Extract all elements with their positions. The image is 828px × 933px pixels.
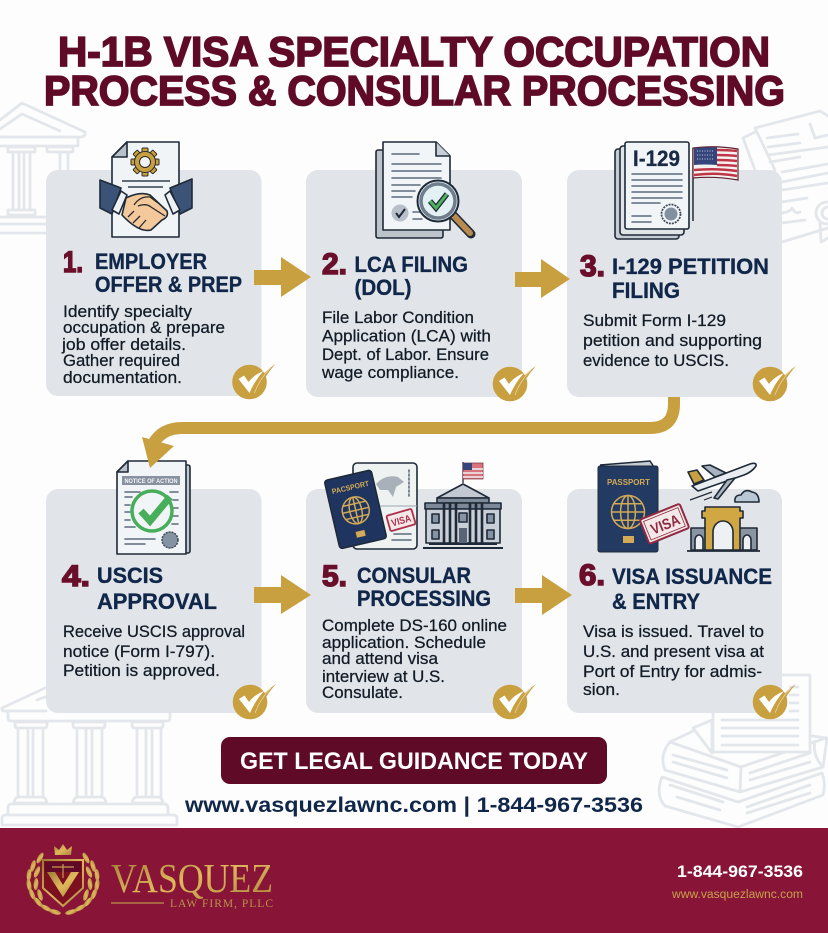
card 2 body text [321, 309, 491, 382]
card 1 body text: documentation. [63, 369, 182, 387]
card 6 body text: Port of Entry for admis- [583, 663, 762, 681]
icon: passport, visa stamp, plane and arch [598, 461, 760, 552]
title: H-1B VISA SPECIALTY OCCUPATION [58, 28, 770, 75]
footer website: www.vasquezlawnc.com [671, 889, 803, 901]
icon: notice of action approval: NOTICE OF ACTION [124, 478, 178, 485]
card 1 heading: EMPLOYER [95, 249, 207, 274]
arrow: step 1 to 2 [254, 257, 311, 297]
icon: passport, visa stamp, plane and arch: PASSPORT [607, 478, 650, 487]
icon: I-129 form and US flag: I-129 [633, 146, 680, 171]
card 5 body text: interview at U.S. [322, 668, 445, 686]
arrow: step 5 to 6 [515, 575, 572, 615]
card 3 heading: FILING [612, 278, 680, 303]
card 6 body text [583, 623, 764, 699]
card 5 heading: PROCESSING [357, 586, 491, 611]
card 3 panel [567, 170, 782, 397]
check badge 4 [233, 684, 276, 719]
card 5 body text [322, 617, 507, 702]
icon: passport, visa page and consulate [324, 462, 503, 549]
contact line: www.vasquezlawnc.com | 1-844-967-3536 [184, 794, 643, 817]
logo: firm name: VASQUEZ [111, 855, 273, 901]
card 1 panel [46, 170, 262, 396]
arrow: step 4 to 5 [254, 575, 311, 614]
check badge 3 [753, 366, 796, 401]
check badge 6 [753, 684, 796, 719]
card 4 body text [63, 623, 245, 680]
arrow: step 2 to 3 [515, 259, 570, 298]
card 2 heading: (DOL) [354, 275, 412, 300]
card 3 heading: I-129 PETITION [612, 254, 769, 279]
check badge 5 [493, 684, 536, 719]
icon: notice of action approval [117, 461, 190, 554]
card 2 body text: File Labor Condition [322, 309, 474, 327]
card 3 body text: Submit Form I-129 [583, 312, 726, 330]
logo: firm name: LAW FIRM, PLLC [170, 898, 273, 910]
card 2 body text: Dept. of Labor. Ensure [322, 346, 489, 364]
card 1 body text: Gather required [63, 352, 180, 370]
card 1 body text: occupation & prepare [63, 319, 225, 337]
card 6 body text: Visa is issued. Travel to [583, 623, 764, 641]
arrow: step 3 to 4 elbow [142, 397, 674, 468]
card 2 body text: Application (LCA) with [322, 328, 491, 346]
card 6 heading [612, 564, 772, 614]
card 5 body text: and attend visa [322, 650, 439, 668]
icon: I-129 form and US flag [615, 142, 738, 239]
check badge 1 [232, 364, 276, 399]
card 6 body text: U.S. and present visa at [583, 643, 764, 661]
logo: crest [26, 844, 100, 916]
card 5 body text: application. Schedule [322, 634, 486, 652]
call to action button: GET LEGAL GUIDANCE TODAY [240, 748, 588, 775]
footer band [0, 828, 828, 933]
card 6 heading: VISA ISSUANCE [612, 564, 772, 589]
card 6 number: 6. [579, 559, 605, 592]
card 2 body text: wage compliance. [321, 364, 459, 382]
card 5 heading: CONSULAR [357, 563, 471, 588]
icon: passport, visa page and consulate: PACSPORT [331, 479, 370, 496]
icon: passport, visa page and consulate: VISA [390, 513, 413, 529]
card 3 number: 3. [580, 250, 605, 283]
card 5 body text: Complete DS-160 online [322, 617, 507, 635]
card 1 heading: OFFER & PREP [95, 272, 242, 297]
check badge 2 [493, 366, 536, 401]
card 4 body text: notice (Form I-797). [63, 643, 215, 661]
card 2 heading: LCA FILING [354, 252, 468, 277]
background: books and paper bottom right [659, 675, 827, 827]
card 3 body text: evidence to USCIS. [583, 352, 729, 370]
card 3 heading [612, 254, 769, 303]
call to action button [221, 737, 607, 784]
background: temple bottom left [2, 688, 177, 825]
icon: LCA document with magnifier [376, 142, 471, 238]
card 1 body text [61, 303, 225, 387]
card 3 body text [583, 312, 762, 370]
card 1 body text: Identify specialty [63, 303, 193, 321]
card 3 body text: petition and supporting [583, 332, 762, 350]
card 5 body text: Consulate. [322, 684, 403, 702]
card 6 body text: sion. [583, 681, 620, 699]
card 1 body text: job offer details. [61, 336, 186, 354]
footer phone: 1-844-967-3536 [677, 863, 803, 881]
card 4 body text: Petition is approved. [63, 662, 220, 680]
card 5 heading [357, 563, 491, 611]
card 5 panel [306, 489, 522, 713]
background: document top right [743, 111, 828, 242]
card 2 panel [306, 170, 522, 397]
card 2 number: 2. [322, 248, 347, 281]
card 4 body text: Receive USCIS approval [63, 623, 245, 641]
title: PROCESS & CONSULAR PROCESSING [44, 67, 785, 114]
card 6 panel [567, 489, 782, 713]
background: temple top left [0, 103, 85, 233]
icon: passport, visa stamp, plane and arch: VISA [648, 511, 683, 539]
card 4 number: 4. [62, 560, 90, 593]
card 1 number: 1. [63, 246, 83, 279]
card 4 heading [97, 563, 217, 614]
card 4 heading: USCIS [97, 563, 163, 588]
card 2 heading [354, 252, 468, 300]
card 5 number: 5. [322, 560, 347, 593]
title [44, 28, 785, 114]
card 1 heading [95, 249, 242, 297]
card 6 heading: & ENTRY [612, 589, 700, 614]
icon: job offer document with handshake [100, 142, 192, 237]
card 4 panel [46, 489, 262, 713]
card 4 heading: APPROVAL [97, 589, 217, 614]
